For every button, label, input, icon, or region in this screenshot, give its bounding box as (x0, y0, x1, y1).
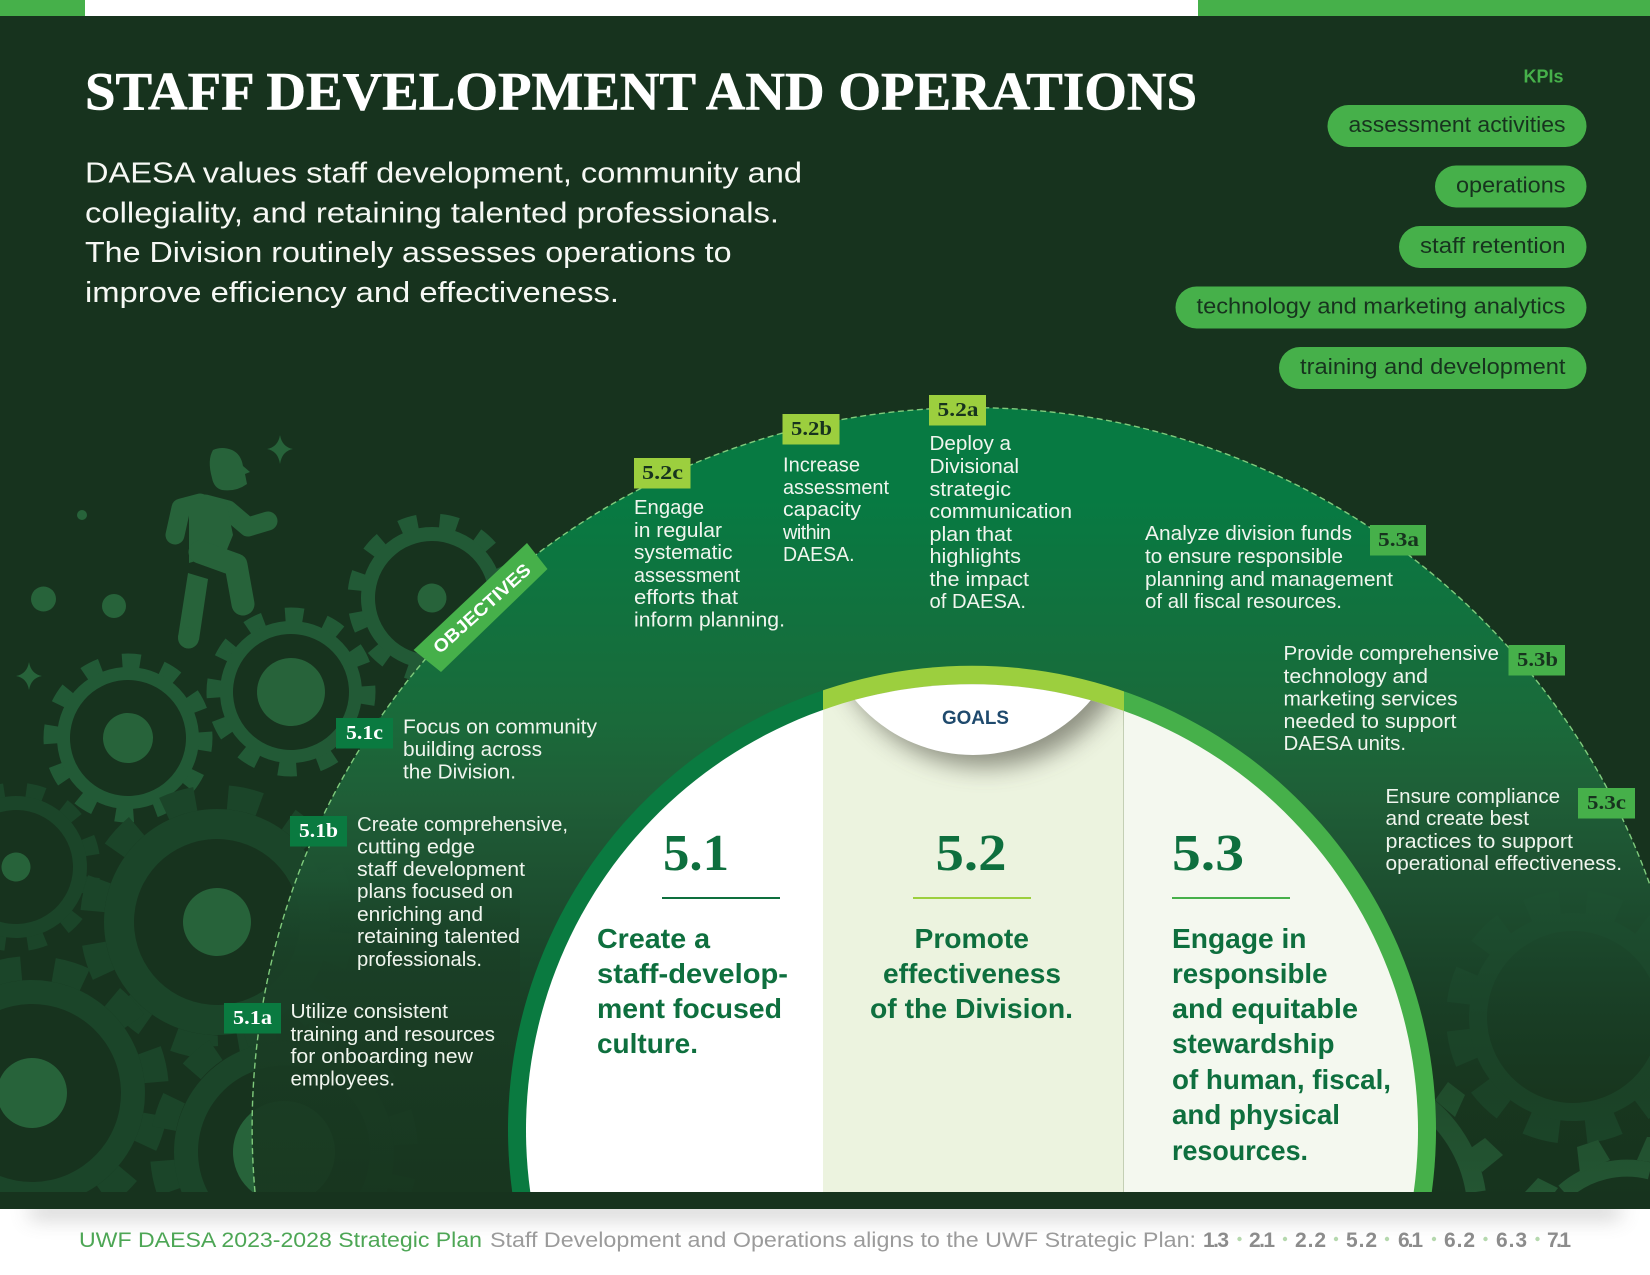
goal 5.3: of human, fiscal, (1172, 1064, 1391, 1095)
goal 5.2: 5.2 (936, 825, 1006, 882)
intro text (85, 158, 802, 309)
objective 5.3a: of all fiscal resources. (1145, 591, 1342, 613)
objective 5.2b: assessment (783, 477, 889, 499)
footer text: Staff Development and Operations aligns to the UWF Strategic Plan: (490, 1229, 1196, 1252)
objective 5.2c: efforts that (634, 587, 738, 609)
icon: gear 10 (1435, 1082, 1503, 1192)
pill: assessment activities (1328, 105, 1586, 147)
icon: gear 9 (1525, 1137, 1650, 1192)
KPI heading: KPIs (1524, 66, 1564, 86)
goal 5.3: responsible (1172, 958, 1328, 989)
objective 5.1c: the Division. (403, 762, 516, 784)
objective 5.3b: marketing services (1284, 688, 1458, 710)
goals tab shadow (842, 684, 1123, 782)
top colour bar (0, 0, 1650, 16)
objective 5.3b: DAESA units. (1284, 733, 1406, 755)
objective 5.1c (336, 716, 597, 784)
goal columns (520, 670, 1424, 1192)
objective 5.1b: retaining talented (357, 926, 520, 948)
goal 5.1 (597, 825, 788, 1059)
goal 5.1: Create a (597, 923, 710, 954)
intro text: The Division routinely assesses operations to (85, 237, 732, 269)
intro text: collegiality, and retaining talented professionals. (85, 198, 779, 230)
objective 5.3a: planning and management (1145, 569, 1393, 591)
goal 5.2: of the Division. (870, 993, 1073, 1024)
objective 5.3b: technology and (1284, 666, 1428, 688)
objective 5.3b: 5.3b (1517, 649, 1558, 671)
objective 5.1a: for onboarding new (290, 1046, 474, 1068)
footer text: 2.1 (1249, 1229, 1275, 1252)
objective 5.2a: Deploy a (930, 433, 1012, 455)
pill: operations: operations (1456, 172, 1566, 198)
objective 5.2c: 5.2c (642, 462, 683, 484)
background illustration: climber on gears (0, 435, 1650, 1238)
goal 5.1: ment focused (597, 993, 782, 1024)
icon: sparkle left (16, 662, 42, 690)
objective 5.1c: building across (403, 739, 542, 761)
objective 5.3c: Ensure compliance (1386, 786, 1560, 808)
panel: objectives dome (245, 408, 1650, 1192)
objective 5.3c: operational effectiveness. (1386, 853, 1622, 875)
objective 5.1b: 5.1b (299, 820, 338, 842)
icon: gear 3 (45, 655, 211, 821)
objective 5.3c: and create best (1386, 808, 1529, 830)
goal 5.2 (870, 825, 1073, 1024)
footer shadow (30, 1204, 1620, 1218)
goals heading: GOALS (942, 708, 1009, 729)
footer text: 7.1 (1547, 1229, 1571, 1252)
icon: gear 6 (0, 956, 168, 1192)
icon: gear 7 (150, 1046, 256, 1192)
objectives ribbon (414, 543, 548, 672)
icon: gear 4 (0, 779, 104, 955)
objective 5.1b: plans focused on (357, 881, 513, 903)
pill: staff retention (1399, 226, 1586, 268)
goal 5.3: and physical (1172, 1099, 1340, 1130)
KPI pills (1176, 105, 1586, 389)
objective 5.3c: 5.3c (1587, 792, 1626, 814)
objective 5.3c: practices to support (1386, 831, 1573, 853)
title: STAFF DEVELOPMENT AND OPERATIONS (85, 62, 1197, 122)
objective 5.1b: cutting edge (357, 836, 475, 858)
objective 5.3a: to ensure responsible (1145, 546, 1343, 568)
panel: goals half circle (508, 666, 1436, 1192)
pill: training and development: training and development (1300, 354, 1566, 379)
pill: technology and marketing analytics: technology and marketing analytics (1196, 294, 1566, 318)
objective 5.1c: Focus on community (403, 716, 597, 738)
objective 5.1c: 5.1c (346, 722, 383, 744)
objective 5.3b (1284, 643, 1565, 755)
goal 5.3: resources. (1172, 1135, 1308, 1166)
objective 5.3c (1386, 786, 1635, 875)
goal 5.3 (1172, 825, 1391, 1166)
objective 5.3b: Provide comprehensive (1284, 643, 1499, 665)
objective 5.1b (290, 814, 568, 971)
objective 5.2b: capacity (783, 499, 861, 521)
objective 5.2b: Increase (783, 454, 860, 476)
footer text: 6.1 (1398, 1229, 1423, 1252)
goal 5.1: staff-develop- (597, 958, 788, 989)
pill: staff retention: staff retention (1420, 233, 1566, 258)
objective 5.2a: strategic (930, 479, 1011, 501)
objective 5.1a: training and resources (290, 1024, 495, 1046)
icon: dots (31, 510, 126, 618)
footer text (79, 1229, 1571, 1252)
intro text: DAESA values staff development, community and (85, 158, 802, 190)
objective 5.2a: 5.2a (938, 399, 978, 421)
goal 5.3: 5.3 (1172, 825, 1244, 882)
objective 5.2a: plan that (930, 524, 1012, 546)
objective 5.2a (929, 395, 1072, 613)
pill: operations (1435, 166, 1586, 208)
objective 5.2c: systematic (634, 542, 732, 564)
objective 5.3b: needed to support (1284, 711, 1457, 733)
icon: gear 8 (1448, 1029, 1650, 1143)
objective 5.1a: employees. (290, 1068, 395, 1090)
objective 5.2a: of DAESA. (930, 591, 1026, 613)
footer text: UWF DAESA 2023-2028 Strategic Plan (79, 1229, 482, 1252)
footer text: 2.2 (1295, 1229, 1326, 1252)
icon: sparkle top (267, 435, 293, 464)
footer text: 1.3 (1203, 1229, 1229, 1252)
goal 5.2: effectiveness (883, 958, 1061, 989)
icon: gear 5 (80, 786, 306, 1056)
icon: gear 2 (208, 609, 374, 775)
pill: training and development (1279, 347, 1586, 389)
objective 5.1b: staff development (357, 859, 525, 881)
goal 5.3: stewardship (1172, 1028, 1334, 1059)
objective 5.2b: DAESA. (783, 544, 854, 566)
goals tab (854, 684, 1091, 755)
objective 5.2b: 5.2b (791, 418, 832, 440)
objective 5.2b: within (782, 522, 831, 544)
pill: assessment activities: assessment activities (1348, 112, 1566, 137)
objective 5.2c (634, 458, 785, 632)
goal 5.1: 5.1 (663, 825, 729, 882)
objective 5.2a: the impact (930, 569, 1029, 591)
objective 5.1a (224, 1001, 495, 1090)
objective 5.1a: Utilize consistent (290, 1001, 448, 1023)
goal 5.3: and equitable (1172, 993, 1358, 1024)
objective 5.2c: assessment (634, 565, 740, 587)
goal ring (500, 660, 1444, 1192)
icon: climbing person (175, 448, 268, 648)
objective 5.3a (1145, 523, 1426, 613)
objective 5.2a: highlights (930, 546, 1021, 568)
goal 5.1: culture. (597, 1028, 698, 1059)
icon: gear 1 (348, 514, 502, 680)
objective 5.1b: Create comprehensive, (357, 814, 568, 836)
objectives ribbon: OBJECTIVES (429, 560, 535, 657)
objective 5.1b: enriching and (357, 904, 483, 926)
objective 5.2a: communication (930, 501, 1072, 523)
objective 5.2b (782, 414, 889, 566)
goal 5.3: Engage in (1172, 923, 1306, 954)
footer text: 6.2 (1444, 1229, 1475, 1252)
pill: technology and marketing analytics (1176, 286, 1586, 328)
goal 5.2: Promote (914, 923, 1029, 954)
intro text: improve efficiency and effectiveness. (85, 277, 619, 309)
objective 5.3a: 5.3a (1378, 529, 1419, 551)
bottom strip (0, 1192, 1650, 1209)
objective 5.1a: 5.1a (233, 1007, 272, 1029)
footer text: 6.3 (1496, 1229, 1527, 1252)
objective 5.2c: inform planning. (634, 610, 785, 632)
objective 5.1b: professionals. (357, 949, 482, 971)
objective 5.2a: Divisional (930, 456, 1019, 478)
objective 5.3a: Analyze division funds (1145, 523, 1352, 545)
footer text: 5.2 (1346, 1229, 1377, 1252)
objective 5.2c: Engage (634, 497, 704, 519)
objective 5.2c: in regular (634, 520, 722, 542)
